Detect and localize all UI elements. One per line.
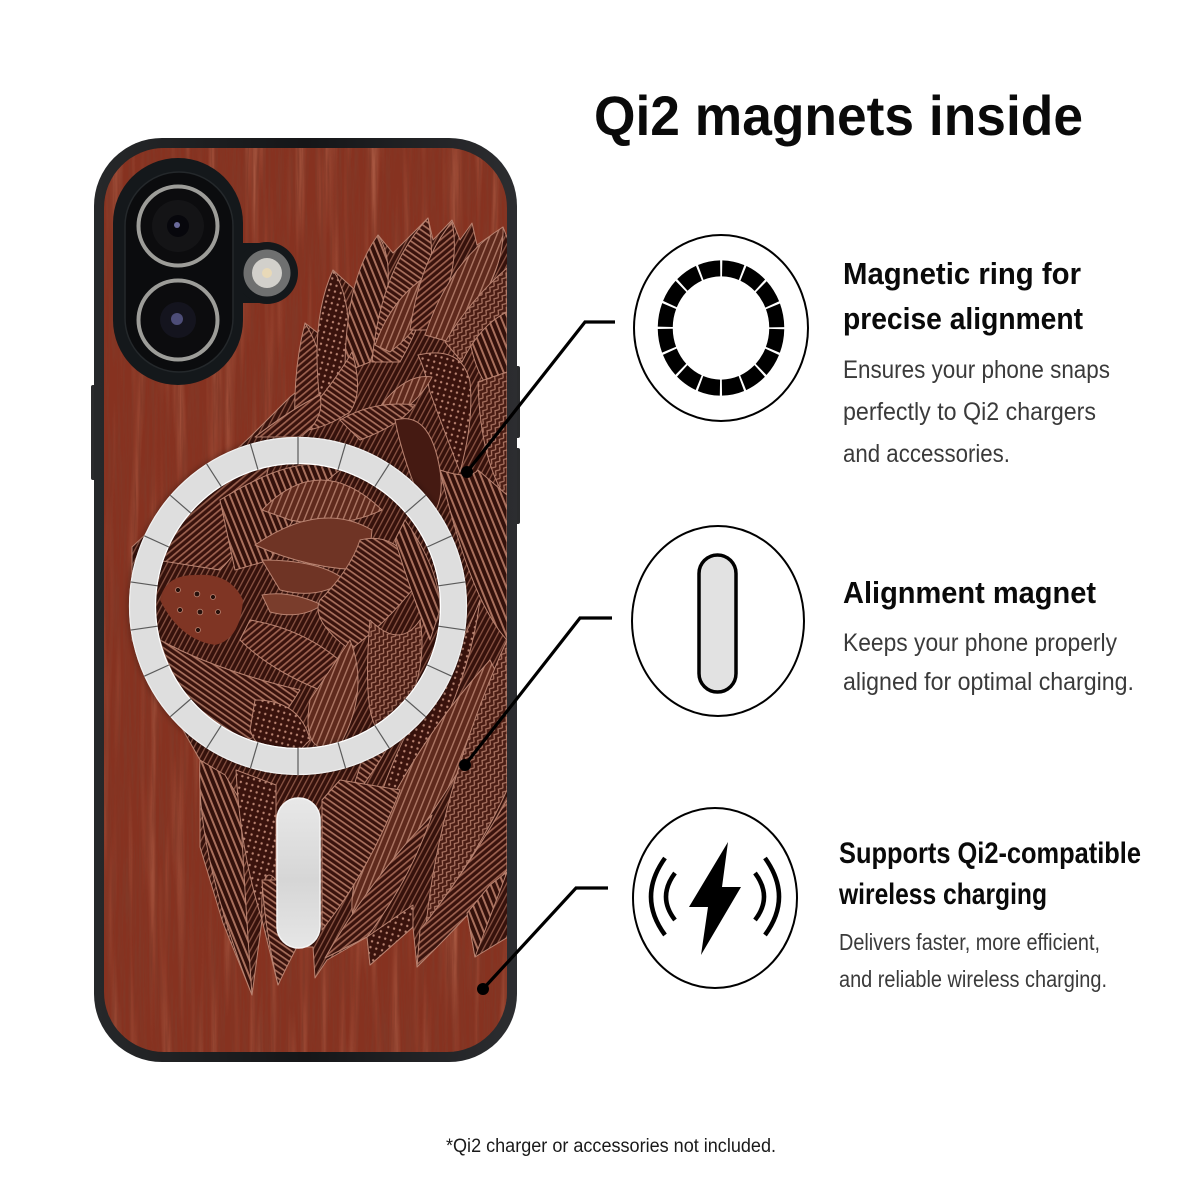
camera island xyxy=(113,158,243,385)
lion engraving: face inside ring xyxy=(160,464,440,748)
magnetic ring xyxy=(130,437,466,775)
text block: magnetic ring: Magnetic ring for xyxy=(843,256,1081,291)
text block: wireless charging: Delivers faster, more efficient, xyxy=(839,929,1100,955)
text block: alignment magnet: aligned for optimal charging. xyxy=(843,668,1134,696)
phone case xyxy=(91,138,520,1062)
text block: wireless charging: Supports Qi2-compatible xyxy=(839,837,1141,870)
text block: magnetic ring: and accessories. xyxy=(843,440,1010,468)
text block: magnetic ring xyxy=(843,256,1110,468)
flash housing xyxy=(236,242,298,304)
text block: wireless charging xyxy=(838,837,1141,992)
leader line: wireless charging xyxy=(477,888,608,995)
text block: wireless charging: wireless charging xyxy=(838,878,1047,911)
icon: wireless charging xyxy=(633,808,797,988)
side buttons xyxy=(91,366,520,524)
leader line: alignment magnet xyxy=(459,618,612,771)
case frame xyxy=(94,138,517,1062)
camera module xyxy=(113,158,298,385)
text block: wireless charging: and reliable wireless charging. xyxy=(839,966,1107,992)
lower lens xyxy=(138,280,218,360)
footnote: *Qi2 charger or accessories not included. xyxy=(446,1136,776,1157)
text block: magnetic ring: precise alignment xyxy=(843,301,1083,336)
alignment magnet pill xyxy=(277,798,320,948)
wood back xyxy=(104,148,508,1052)
upper lens xyxy=(138,186,218,266)
text block: magnetic ring: Ensures your phone snaps xyxy=(843,356,1110,384)
text block: alignment magnet: Keeps your phone properly xyxy=(843,629,1117,657)
leader line: magnetic ring xyxy=(461,322,615,478)
text block: alignment magnet: Alignment magnet xyxy=(843,575,1096,610)
icon: alignment magnet xyxy=(632,526,804,716)
text block: magnetic ring: perfectly to Qi2 chargers xyxy=(843,398,1096,426)
title: Qi2 magnets inside xyxy=(594,84,1083,147)
lion engraving: mane xyxy=(132,218,508,995)
icon: magnetic ring xyxy=(634,235,808,421)
text block: alignment magnet xyxy=(843,575,1134,696)
